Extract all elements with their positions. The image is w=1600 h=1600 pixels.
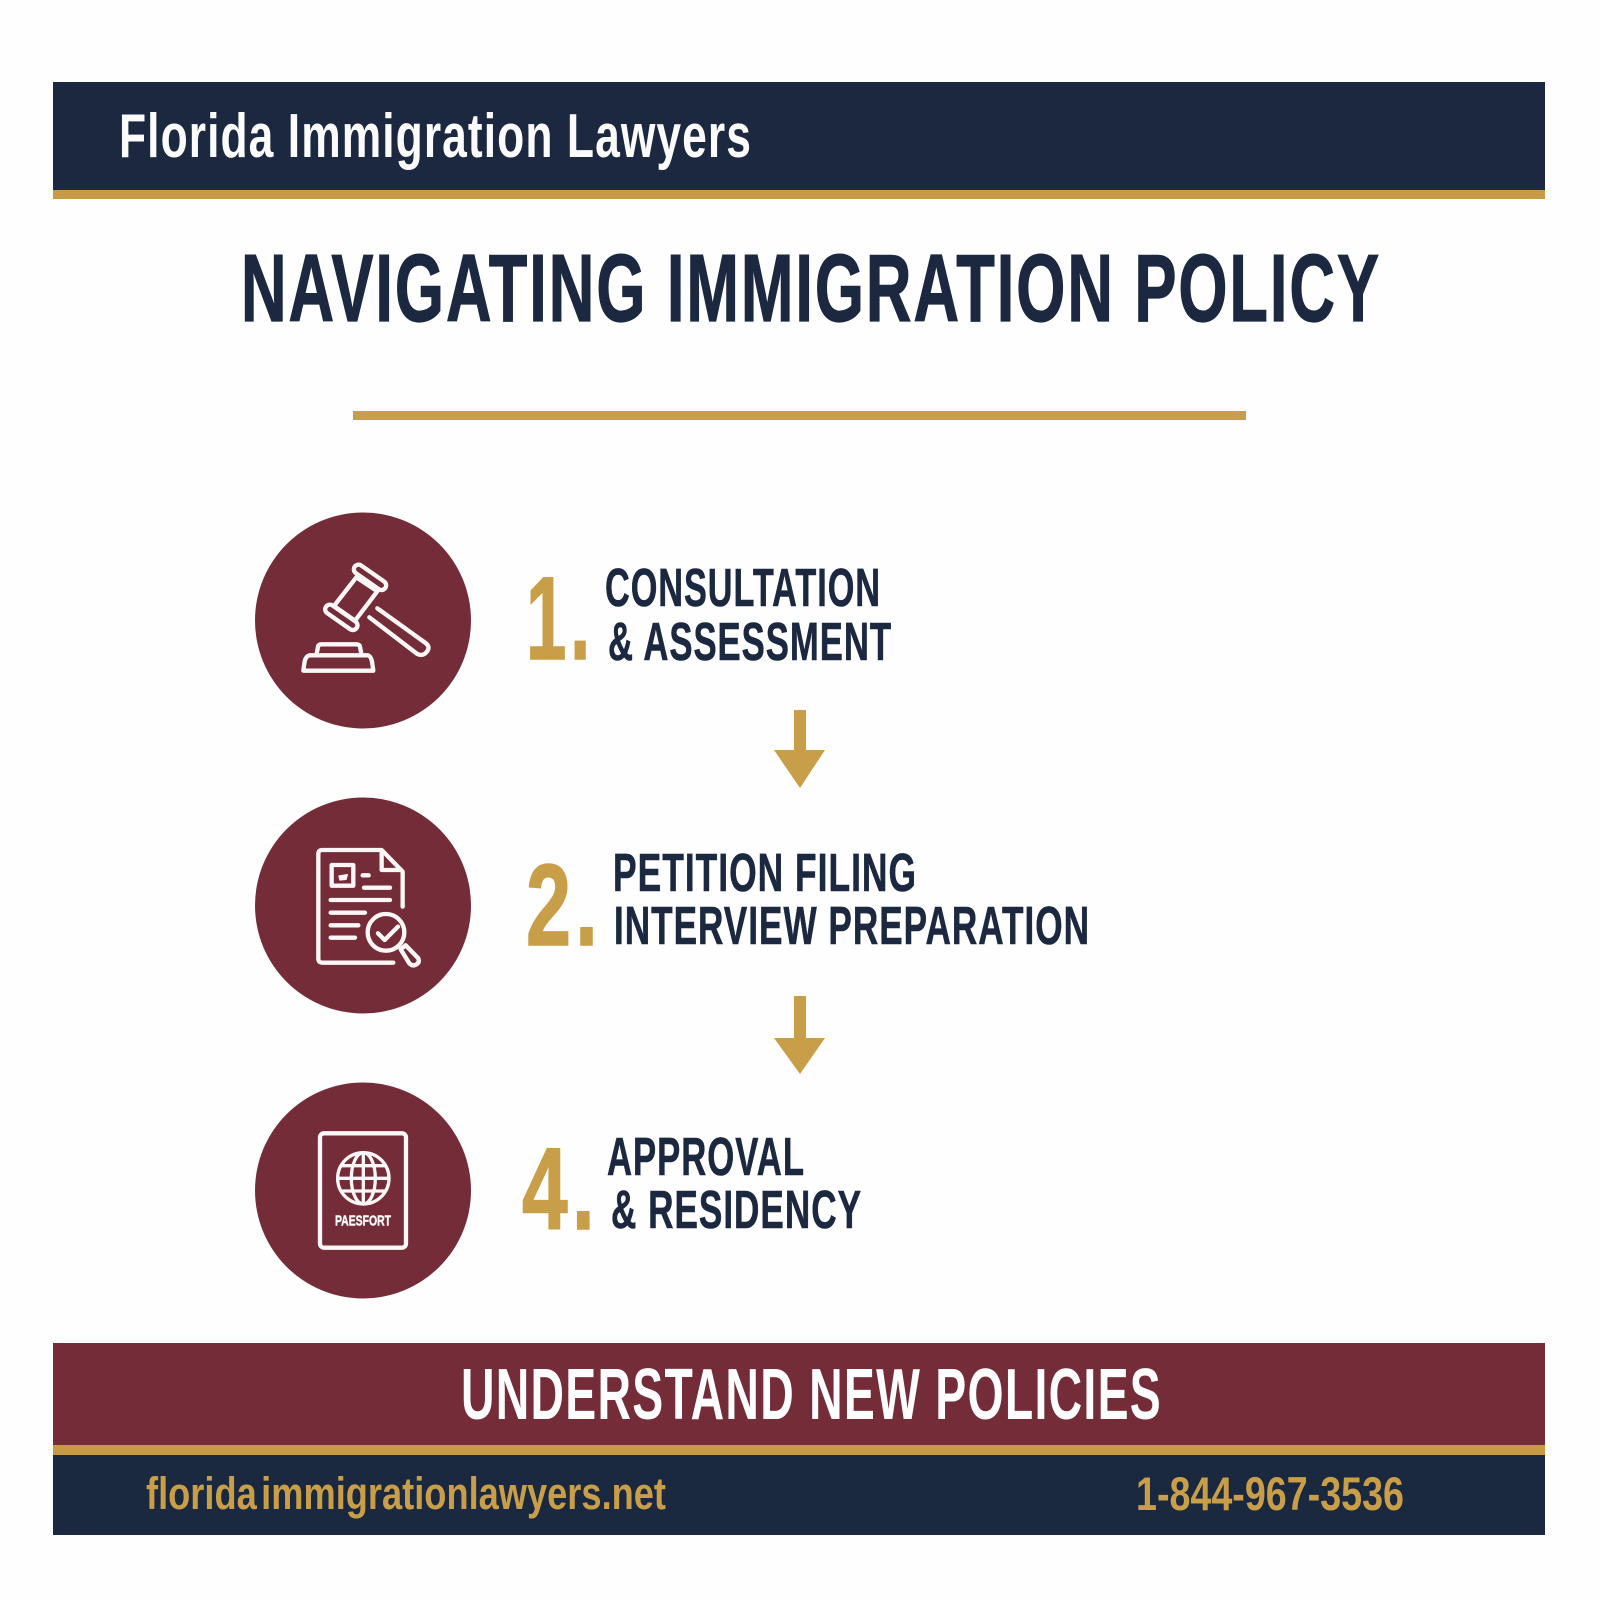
- footer divider: [53, 1445, 1545, 1455]
- arrow 1 to 2: [774, 710, 825, 788]
- title underline: [353, 411, 1246, 420]
- step 3 label: & RESIDENCY: [611, 1180, 862, 1240]
- header brand name: Florida Immigration Lawyers: [119, 102, 752, 171]
- step 1: [255, 512, 892, 728]
- icon: document with magnifier: [255, 798, 471, 1014]
- footer contact bar: [53, 1455, 1545, 1535]
- step 1 label: [605, 558, 892, 672]
- step 2 label: [613, 843, 1090, 956]
- step 2 label: INTERVIEW PREPARATION: [614, 896, 1090, 956]
- website: florida immigrationlawyers.net: [146, 1468, 666, 1519]
- header banner: [53, 82, 1545, 199]
- phone number: 1-844-967-3536: [1136, 1467, 1404, 1520]
- step 2: [255, 798, 1090, 1014]
- step 1 label: CONSULTATION: [605, 558, 881, 618]
- arrow 2 to 3: [774, 996, 825, 1074]
- step 2 label: PETITION FILING: [613, 843, 917, 903]
- number 1: 1.: [526, 553, 594, 685]
- call to action banner: [53, 1343, 1545, 1445]
- call to action text: UNDERSTAND NEW POLICIES: [461, 1355, 1162, 1435]
- step 1 label: & ASSESSMENT: [608, 612, 892, 672]
- number 4: 4.: [522, 1124, 599, 1254]
- number 2: 2.: [526, 840, 602, 970]
- step 3 label: [607, 1127, 862, 1240]
- step 3 label: APPROVAL: [607, 1127, 805, 1187]
- icon: passport: [255, 1082, 471, 1298]
- step 3: [255, 1082, 862, 1298]
- passport label: PAESFORT: [335, 1214, 391, 1230]
- icon: gavel: [255, 512, 471, 728]
